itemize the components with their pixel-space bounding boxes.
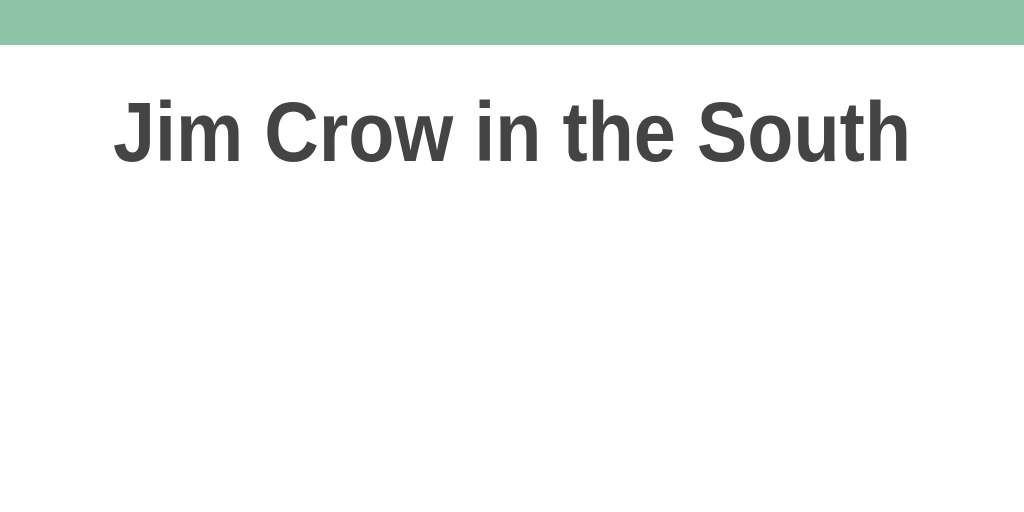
header bar — [0, 0, 1024, 45]
title: Jim Crow in the South — [113, 85, 911, 179]
